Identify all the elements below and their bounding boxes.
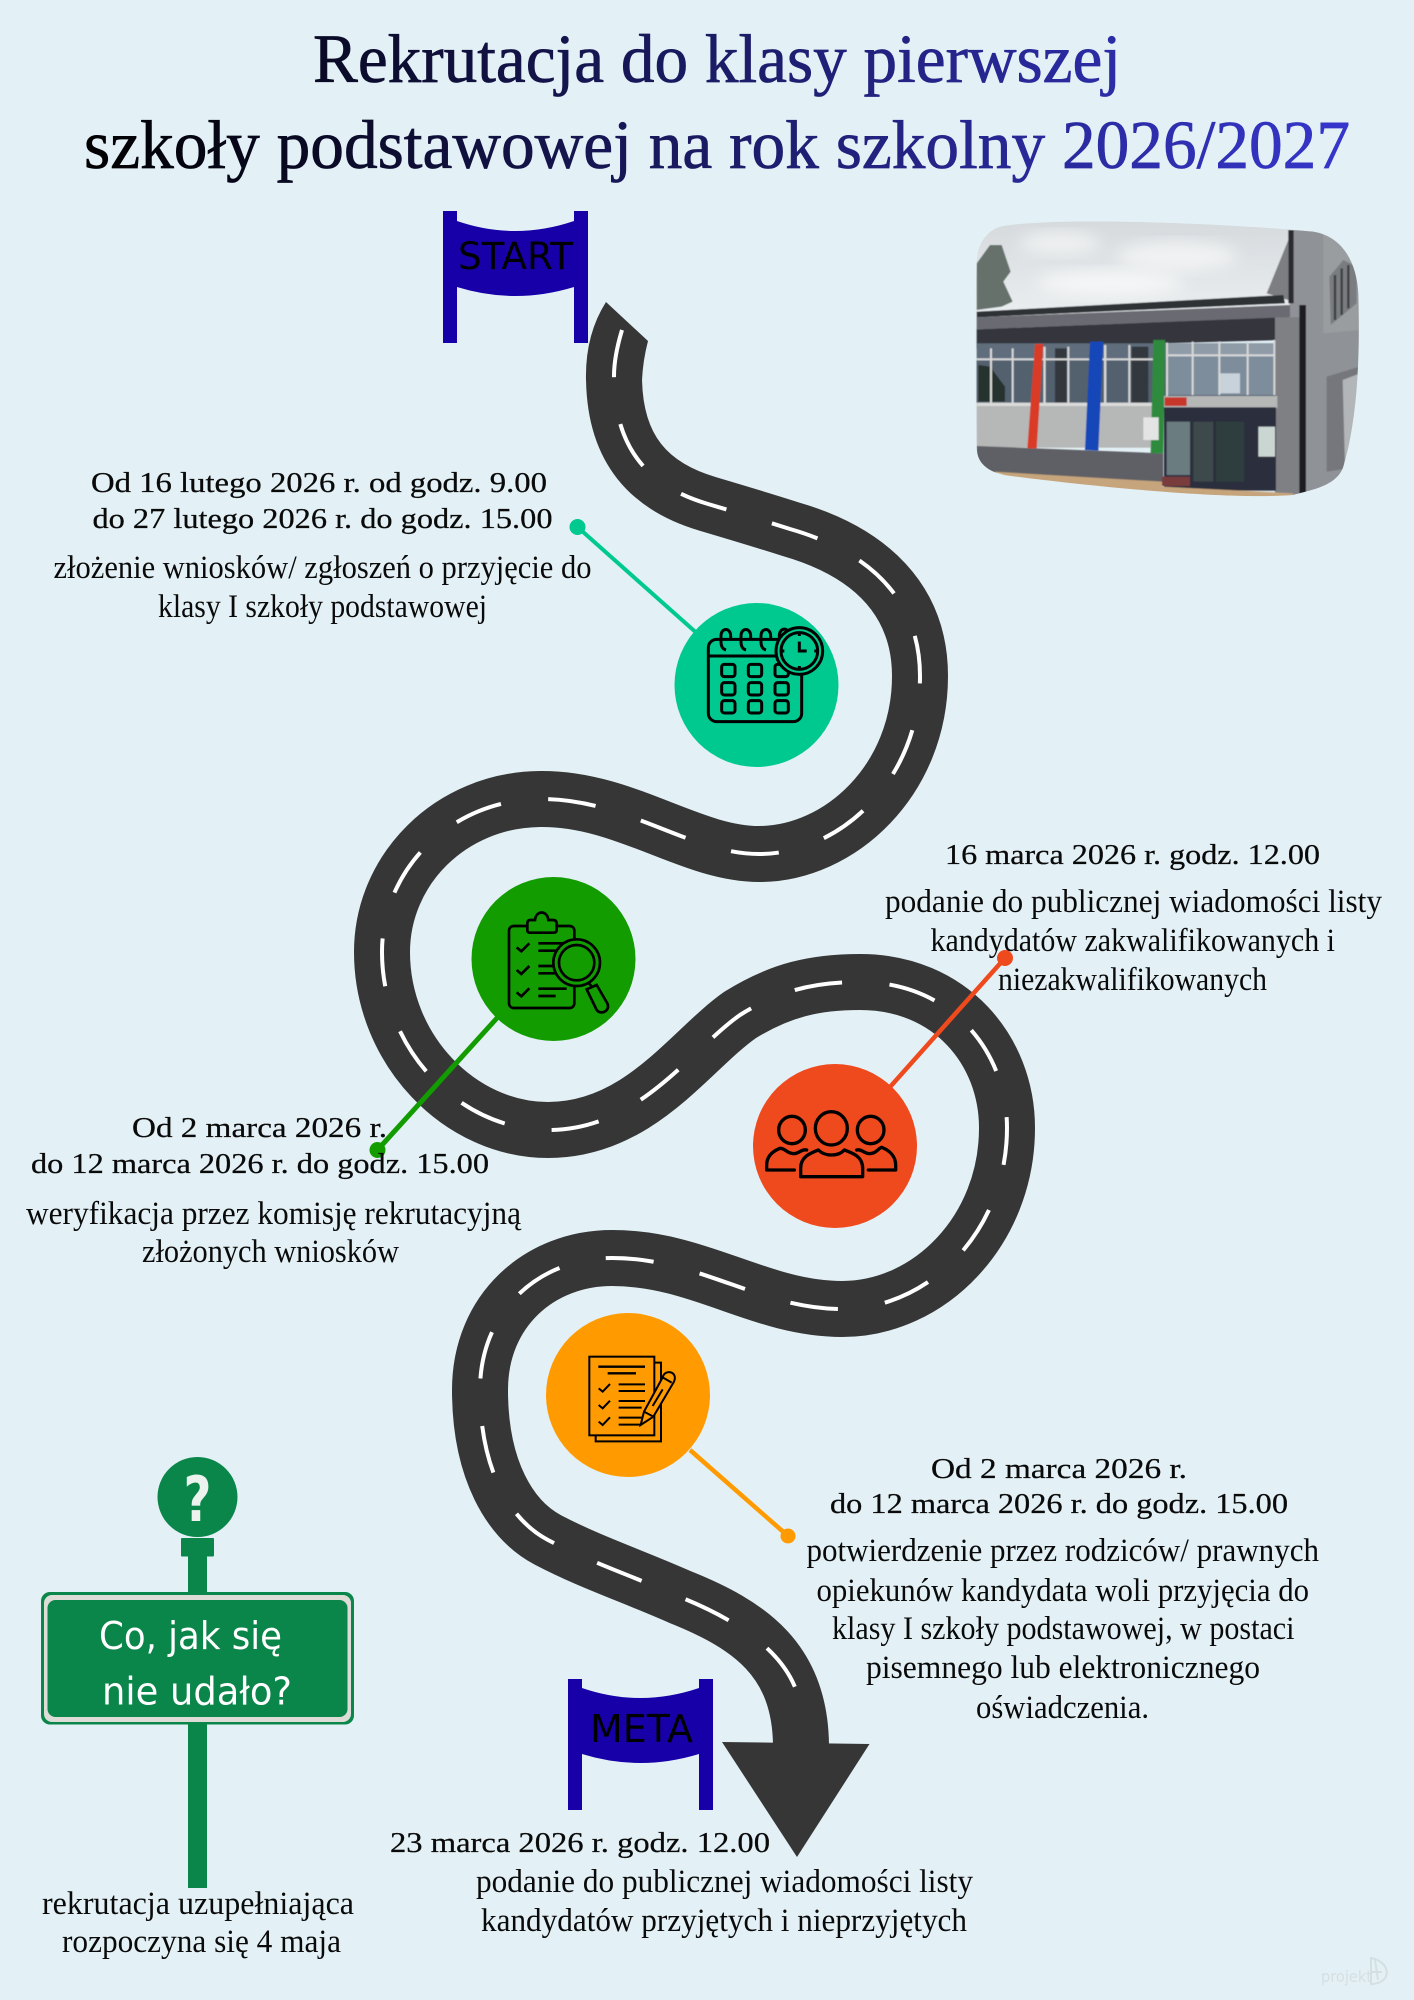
text: step 3 date and description: 16 marca 2026 r. godz. 12.00 (945, 839, 1320, 871)
text: step 4 dates and description: oświadczenia. (976, 1690, 1149, 1726)
watermark: projekt (1321, 1967, 1372, 1986)
text: step 2 dates and description: weryfikacja przez komisję rekrutacyjną (26, 1196, 521, 1232)
text: step 4 dates and description: opiekunów kandydata woli przyjęcia do (816, 1573, 1309, 1609)
START banner (443, 211, 588, 343)
title (84, 21, 1350, 183)
text: supplementary recruitment note: rekrutacja uzupełniająca (42, 1886, 354, 1922)
question mark circle (158, 1457, 238, 1537)
connector: step 1 (570, 519, 700, 636)
road sign (41, 1457, 354, 1888)
text: step 4 dates and description: klasy I szkoły podstawowej, w postaci (832, 1611, 1294, 1647)
sign board: Co, jak się (99, 1614, 282, 1658)
text: step 1 dates and description (54, 467, 592, 625)
text: step 3 date and description: niezakwalifikowanych (998, 962, 1267, 998)
road with arrow (382, 302, 1007, 1857)
title: Rekrutacja do klasy pierwszej (313, 21, 1121, 97)
step 4 circle with document icon (546, 1313, 710, 1477)
connector: step 3 (890, 950, 1013, 1087)
text: step 1 dates and description: do 27 lutego 2026 r. do godz. 15.00 (92, 503, 552, 535)
school photo (973, 217, 1363, 500)
text: step 1 dates and description: Od 16 lutego 2026 r. od godz. 9.00 (91, 467, 547, 499)
text: step 2 dates and description (26, 1112, 521, 1270)
step 3 circle with people icon (753, 1064, 917, 1228)
sign board (41, 1592, 354, 1724)
connector: step 4 (690, 1450, 796, 1544)
step 1 circle with calendar icon (674, 603, 838, 767)
post cap (181, 1538, 214, 1556)
text: step 4 dates and description: potwierdzenie przez rodziców/ prawnych (806, 1533, 1319, 1569)
text: step 1 dates and description: klasy I szkoły podstawowej (158, 589, 487, 625)
text: step 4 dates and description (806, 1453, 1319, 1726)
step 2 circle with clipboard icon (472, 877, 636, 1041)
question mark circle: ? (184, 1463, 212, 1536)
text: step 3 date and description: podanie do publicznej wiadomości listy (885, 884, 1382, 920)
text: supplementary recruitment note: rozpoczyna się 4 maja (62, 1924, 341, 1960)
sign post (188, 1556, 207, 1888)
text: final date and description (390, 1827, 973, 1939)
text: step 1 dates and description: złożenie wniosków/ zgłoszeń o przyjęcie do (54, 550, 592, 586)
text: step 4 dates and description: Od 2 marca 2026 r. (931, 1453, 1187, 1485)
text: final date and description: 23 marca 2026 r. godz. 12.00 (390, 1827, 770, 1859)
text: step 3 date and description: kandydatów zakwalifikowanych i (930, 923, 1335, 959)
text: final date and description: podanie do publicznej wiadomości listy (476, 1864, 973, 1900)
title: szkoły podstawowej na rok szkolny 2026/2027 (84, 107, 1350, 183)
connector: step 2 (370, 1018, 497, 1158)
text: step 2 dates and description: złożonych wniosków (142, 1234, 399, 1270)
text: step 2 dates and description: Od 2 marca 2026 r. (132, 1112, 387, 1144)
text: step 2 dates and description: do 12 marca 2026 r. do godz. 15.00 (31, 1148, 489, 1180)
text: step 3 date and description (885, 839, 1382, 998)
text: step 4 dates and description: do 12 marca 2026 r. do godz. 15.00 (830, 1488, 1288, 1520)
META banner: META (590, 1707, 693, 1751)
text: step 4 dates and description: pisemnego lub elektronicznego (866, 1650, 1260, 1686)
META banner (568, 1679, 713, 1810)
text: final date and description: kandydatów przyjętych i nieprzyjętych (481, 1903, 967, 1939)
sign board: nie udało? (102, 1670, 292, 1714)
text: supplementary recruitment note (42, 1886, 354, 1960)
watermark (1321, 1958, 1387, 1986)
START banner: START (458, 235, 573, 278)
